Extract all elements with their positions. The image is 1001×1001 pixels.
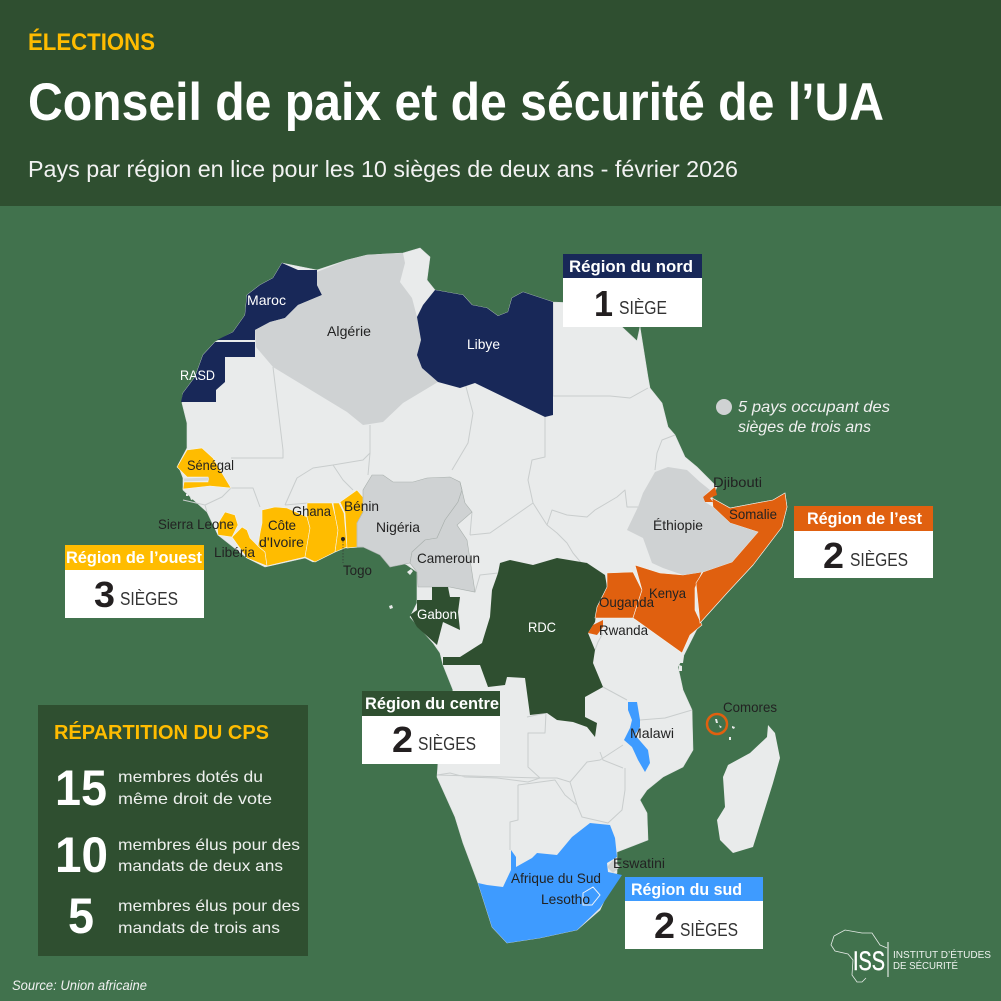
stat: 5: mandats de trois ans — [118, 920, 280, 937]
legend: three-year seats — [716, 399, 890, 436]
country labels: Rwanda — [599, 622, 648, 638]
Gambia — [184, 479, 209, 480]
panel: région du nord: SIÈGE — [619, 298, 667, 318]
country labels: Éthiopie — [653, 517, 703, 533]
country labels: Kenya — [649, 585, 686, 601]
Liberia — [232, 527, 267, 566]
stat: 5: 5 — [68, 888, 94, 944]
panel heading: RÉPARTITION DU CPS — [54, 721, 269, 744]
header banner — [0, 0, 1001, 206]
panel: région de l'est — [794, 506, 933, 578]
panel: région de l'ouest: Région de l’ouest — [66, 548, 202, 567]
Gabon — [410, 587, 460, 645]
logo: ISS — [831, 930, 991, 982]
country borders — [183, 302, 692, 850]
country labels: Libéria — [214, 544, 255, 560]
Madagascar — [717, 725, 780, 853]
panel: région de l'est: SIÈGES — [850, 550, 908, 570]
legend: three-year seats: 5 pays occupant des — [738, 399, 890, 416]
country labels: Comores — [723, 699, 777, 715]
small islands — [186, 494, 735, 740]
stat: 10: membres élus pour des — [118, 837, 300, 854]
panel: région du centre: 2 — [392, 719, 413, 760]
stat: 5: membres élus pour des — [118, 898, 300, 915]
country labels: d'Ivoire — [259, 534, 304, 550]
country labels: Afrique du Sud — [511, 870, 601, 886]
logo: ISS: DE SÉCURITÉ — [893, 959, 958, 972]
panel: région du nord: Région du nord — [569, 257, 693, 276]
source: Source: Union africaine — [12, 977, 147, 993]
country labels: Malawi — [630, 725, 674, 741]
country labels: Ouganda — [599, 594, 654, 610]
panel: région du nord: 1 — [594, 283, 613, 324]
kicker: ÉLECTIONS — [28, 28, 155, 56]
RASD — [181, 342, 255, 402]
Uganda — [595, 572, 642, 618]
country labels: Lesotho — [541, 891, 590, 907]
country labels: Cameroun — [417, 550, 480, 566]
Kenya — [633, 565, 702, 653]
panel: région du centre — [362, 691, 500, 764]
map of Africa — [177, 248, 787, 943]
panel: région du centre: Région du centre — [365, 694, 499, 713]
South Africa — [478, 823, 622, 943]
country labels: Côte — [268, 517, 296, 533]
panel: région de l'ouest — [65, 545, 204, 618]
Ghana — [305, 503, 338, 562]
stat: 15: même droit de vote — [118, 791, 272, 808]
country labels: Sierra Leone — [158, 516, 234, 532]
DRC — [443, 558, 607, 737]
Senegal — [177, 448, 231, 489]
Malawi — [624, 702, 650, 772]
Rwanda — [588, 620, 603, 635]
title: Conseil de paix et de sécurité de l’UA — [28, 73, 884, 132]
country labels: RASD — [180, 367, 215, 383]
panel: région du sud: SIÈGES — [680, 920, 738, 940]
legend: three-year seats: sièges de trois ans — [738, 419, 871, 436]
Ivory Coast — [258, 507, 310, 566]
panel: région du centre: SIÈGES — [418, 734, 476, 754]
Djibouti — [703, 487, 717, 502]
country labels: Eswatini — [613, 855, 665, 871]
country labels — [158, 292, 777, 907]
panel: région de l'ouest: SIÈGES — [120, 589, 178, 609]
panel: région de l'ouest: 3 — [94, 574, 115, 615]
continent base — [178, 248, 787, 943]
Togo — [333, 503, 347, 552]
Togo leader line — [341, 537, 345, 563]
logo: ISS: INSTITUT D’ÉTUDES — [893, 948, 991, 961]
Benin — [340, 490, 363, 548]
stat: 15: membres dotés du — [118, 769, 263, 786]
panel: répartition du CPS — [38, 705, 308, 956]
stat: 15 — [55, 760, 272, 816]
subtitle: Pays par région en lice pour les 10 sièges de deux ans - février 2026 — [28, 156, 738, 182]
country labels: Somalie — [729, 506, 777, 522]
panel: région du nord — [563, 254, 702, 327]
panel: région du sud: 2 — [654, 905, 675, 946]
stat: 15: 15 — [55, 760, 107, 816]
Eswatini — [607, 860, 620, 873]
Comoros marker — [707, 714, 727, 734]
panel: région de l'est: 2 — [823, 535, 844, 576]
logo: ISS: ISS — [853, 946, 885, 976]
panel: région de l'est: Région de l’est — [807, 509, 922, 528]
Nigeria — [357, 475, 462, 567]
stat: 10: mandats de deux ans — [118, 858, 283, 875]
Algeria — [255, 253, 438, 425]
country labels: Gabon — [417, 606, 457, 622]
country labels: Djibouti — [713, 474, 762, 490]
Ethiopia — [627, 467, 758, 575]
Comoros islands — [715, 719, 722, 728]
country labels: Sénégal — [187, 457, 234, 473]
Cameroon — [410, 482, 475, 592]
country labels: Libye — [467, 336, 500, 352]
stat: 10: 10 — [55, 827, 108, 883]
Libya — [417, 290, 553, 417]
panel: région du sud — [625, 877, 763, 949]
stat: 5 — [68, 888, 300, 944]
country labels: Bénin — [344, 498, 379, 514]
Lesotho — [583, 887, 600, 905]
Morocco — [217, 263, 322, 340]
country labels: Togo — [343, 562, 372, 578]
country labels: Algérie — [327, 323, 371, 339]
stat: 10 — [55, 827, 300, 883]
Somalia — [696, 493, 787, 623]
panel: région du sud: Région du sud — [631, 880, 742, 899]
country labels: Nigéria — [376, 519, 420, 535]
country labels: Ghana — [292, 503, 331, 519]
Sierra Leone — [217, 512, 238, 537]
country labels: Maroc — [247, 292, 286, 308]
country labels: RDC — [528, 619, 556, 635]
